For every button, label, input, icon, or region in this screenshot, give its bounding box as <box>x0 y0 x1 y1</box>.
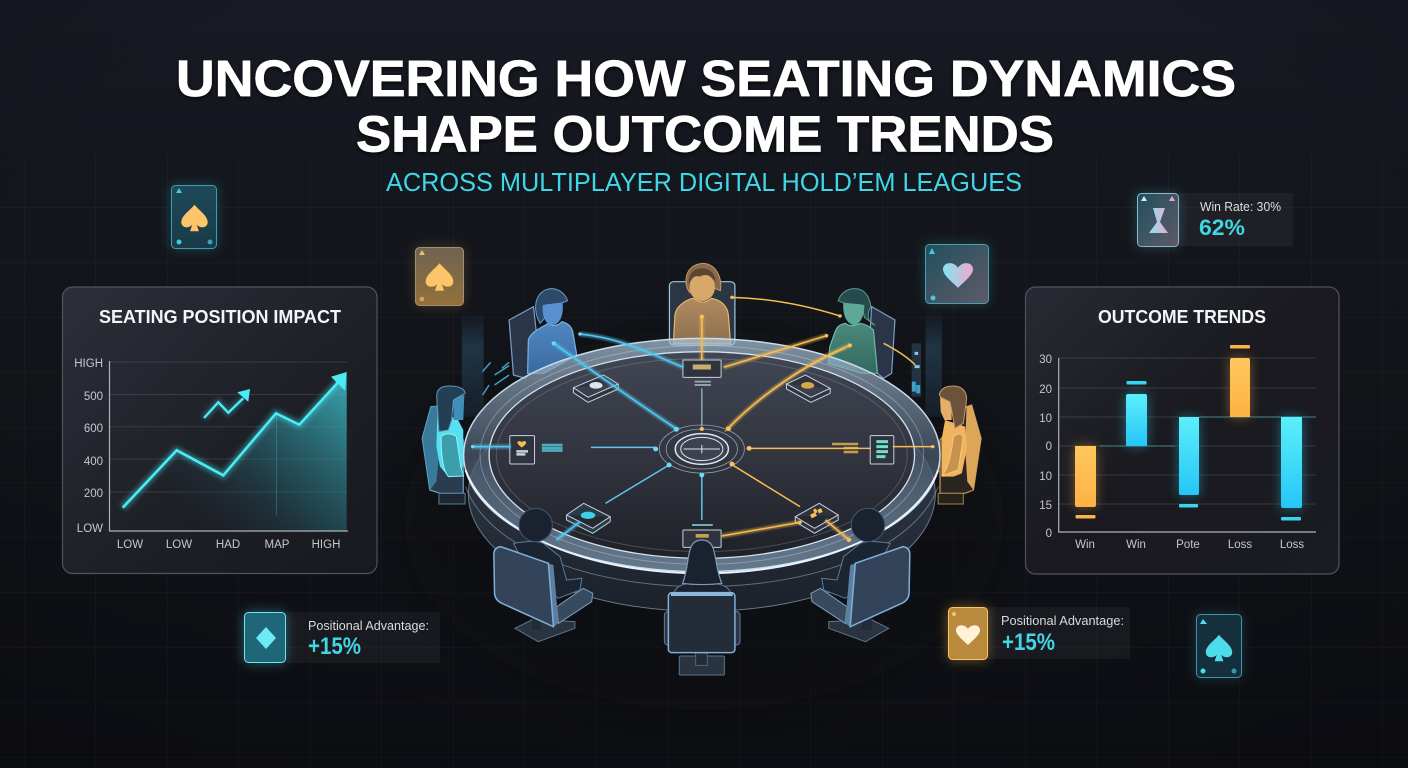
bar chart <box>1039 345 1316 551</box>
bar chart: 10 <box>1039 413 1052 425</box>
bar chart: Loss <box>1228 539 1252 551</box>
connection lines: blue <box>473 334 702 540</box>
diagram: seating table scene <box>422 263 981 675</box>
title: UNCOVERING HOW SEATING DYNAMICS <box>176 50 1236 107</box>
callout: left positional advantage: Positional Advantage: <box>308 619 429 633</box>
icon: orange spade card <box>415 247 464 306</box>
player: top left <box>509 289 577 378</box>
player: bottom right <box>811 508 910 642</box>
bar chart: Win <box>1126 539 1146 551</box>
heading: outcome trends: OUTCOME TRENDS <box>1098 307 1266 327</box>
holographic side panels <box>462 310 942 417</box>
player: bottom left <box>494 508 593 642</box>
player: bottom center <box>664 540 740 675</box>
connection lines: gold glow <box>702 317 850 540</box>
title: SHAPE OUTCOME TRENDS <box>356 106 1054 162</box>
line chart: 400 <box>84 456 103 468</box>
callout: win rate <box>1137 193 1293 247</box>
bar chart: Win <box>1075 539 1095 551</box>
player: left <box>422 386 465 504</box>
icon: heart card <box>925 244 989 304</box>
subtitle: ACROSS MULTIPLAYER DIGITAL HOLD’EM LEAGUES <box>386 169 1022 197</box>
callout: left positional advantage <box>244 612 440 663</box>
callout: right positional advantage: Positional Advantage: <box>1001 614 1124 628</box>
panel: outcome trends <box>1026 287 1339 574</box>
line chart: HAD <box>216 539 240 551</box>
callout: right positional advantage <box>948 607 1130 660</box>
line chart: HIGH <box>74 358 103 370</box>
bar chart: 20 <box>1039 384 1052 396</box>
table felt <box>489 352 915 558</box>
line chart: 200 <box>84 488 103 500</box>
bar chart: 15 <box>1039 500 1052 512</box>
line chart: MAP <box>265 539 290 551</box>
icon: top-left spade card <box>171 185 217 249</box>
line chart: HIGH <box>312 539 340 551</box>
line chart: LOW <box>77 523 103 535</box>
bar chart: 0 <box>1046 441 1052 453</box>
callout: win rate: 62% <box>1199 215 1245 240</box>
table tokens <box>510 360 894 547</box>
bar chart: 30 <box>1039 354 1052 366</box>
line chart: 600 <box>84 423 103 435</box>
icon: bottom-right spade card <box>1196 614 1242 678</box>
callout: win rate: Win Rate: 30% <box>1200 200 1281 214</box>
line chart: LOW <box>166 539 192 551</box>
line chart: LOW <box>117 539 143 551</box>
token glyphs <box>516 367 888 538</box>
bar chart: Pote <box>1176 539 1200 551</box>
panel: seating position impact <box>62 287 377 574</box>
line chart: 500 <box>84 391 103 403</box>
table wall <box>468 377 935 611</box>
callout: right positional advantage: +15% <box>1002 629 1055 656</box>
bar chart: 0 <box>1046 528 1052 540</box>
central hub <box>659 425 744 473</box>
player: top right <box>828 289 895 378</box>
bar chart: 10 <box>1039 471 1052 483</box>
player: top center <box>669 263 735 345</box>
title <box>176 50 1236 162</box>
table <box>464 338 940 611</box>
line chart <box>74 358 348 551</box>
line nodes <box>471 296 935 542</box>
connection lines: gold <box>702 297 933 540</box>
table rim <box>464 338 940 572</box>
connection lines: blue glow <box>473 334 684 540</box>
heading: seating position impact: SEATING POSITION IMPACT <box>99 307 341 327</box>
player: right <box>938 386 981 504</box>
bar chart: Loss <box>1280 539 1304 551</box>
callout: left positional advantage: +15% <box>308 633 361 660</box>
